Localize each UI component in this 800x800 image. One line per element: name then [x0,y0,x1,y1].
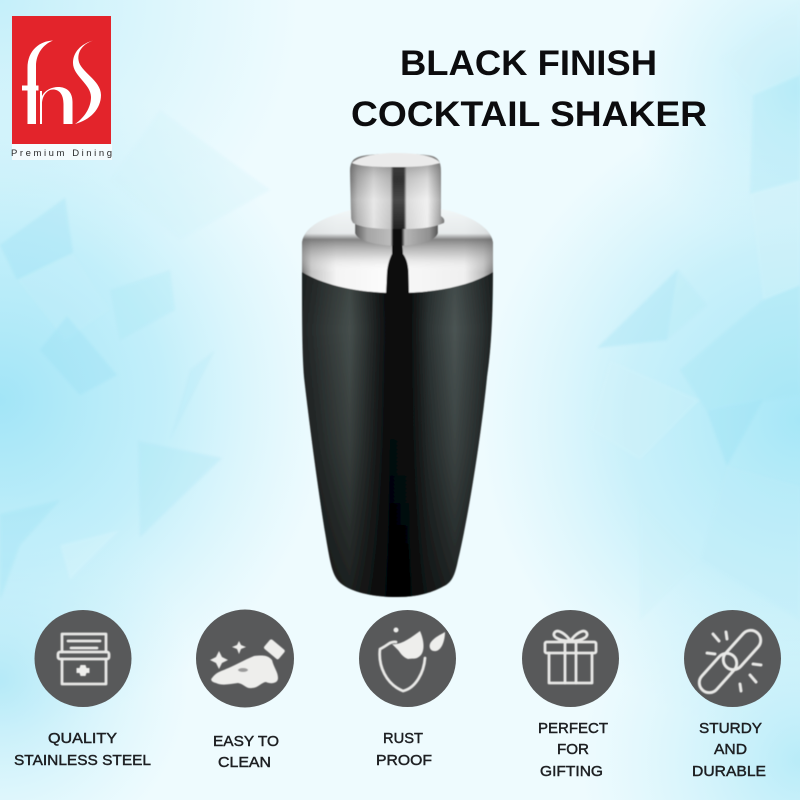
title: BLACK FINISH [400,44,657,83]
logo letter f [22,40,53,124]
label [213,733,279,771]
shaker black body [302,262,493,597]
label: EASY TO [213,733,279,750]
label: STAINLESS STEEL [14,752,151,769]
icon: spill and sparkles [196,610,294,708]
logo: FnS Premium Dining [11,16,112,160]
shaker cap [350,153,444,246]
title: COCKTAIL SHAKER [351,95,707,134]
feature 1: quality stainless steel [14,610,151,769]
shaker silver shoulder [302,208,493,294]
label [14,730,151,769]
label: RUST [383,730,423,747]
feature 4: perfect for gifting [522,610,619,780]
label: PROOF [376,752,432,769]
label [538,720,608,780]
icon: cooler box [34,610,132,707]
feature 3: rust proof [359,610,456,769]
feature 2: easy to clean [196,610,294,771]
label: CLEAN [218,754,271,771]
icon: chain link [684,610,781,707]
feature 5: sturdy and durable [684,610,781,780]
icon: shield with droplets [359,610,456,707]
label: AND [714,741,747,758]
label: STURDY [699,720,762,737]
label [692,720,766,780]
label: FOR [557,741,589,758]
logo letter n [40,87,72,124]
logo letter S [73,40,101,124]
title [351,44,707,134]
label: GIFTING [540,763,603,780]
label [376,730,432,769]
icon: gift box [522,610,619,707]
label: PERFECT [538,720,608,737]
label: QUALITY [48,730,117,747]
logo tagline: Premium Dining [11,148,112,159]
product: cocktail shaker [302,153,493,597]
label: DURABLE [692,763,766,780]
